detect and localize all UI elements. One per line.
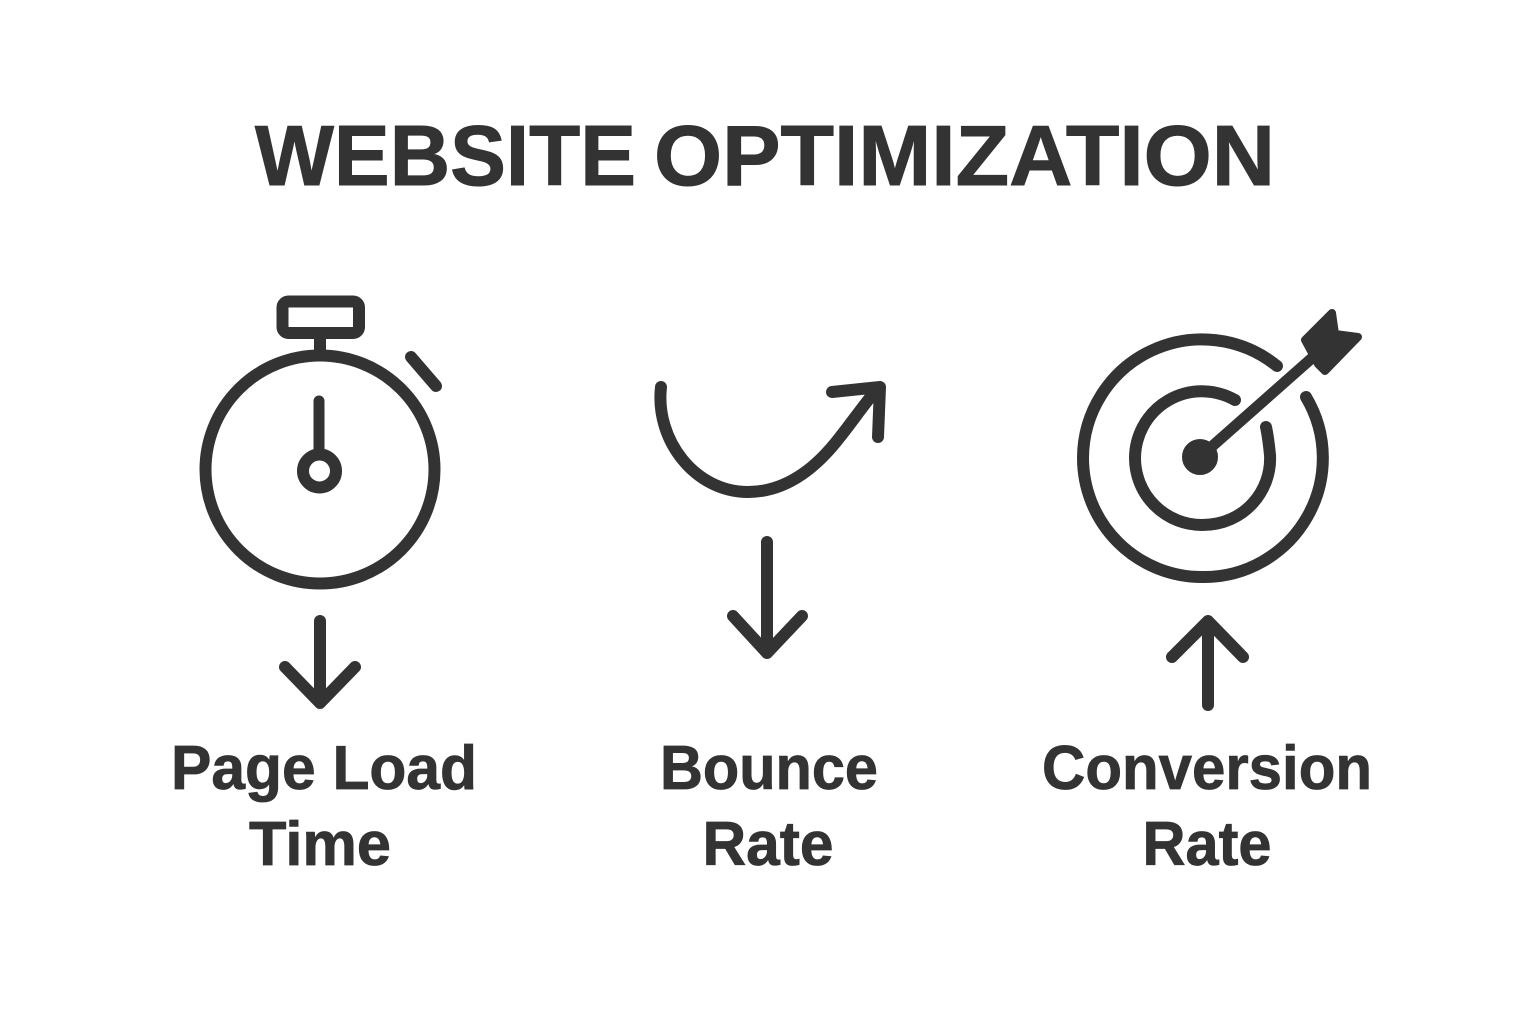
label: bounce rate bbox=[660, 734, 878, 879]
label: page load time: Time bbox=[249, 810, 391, 879]
label: conversion rate: Rate bbox=[1142, 810, 1272, 879]
arrow: conversion rate up bbox=[1172, 621, 1243, 705]
label: bounce rate: Bounce bbox=[660, 734, 878, 803]
title: WEBSITE bbox=[255, 109, 636, 204]
arrow: bounce rate down bbox=[733, 542, 802, 653]
label: bounce rate: Rate bbox=[702, 810, 834, 879]
icon: bounce curve bbox=[660, 387, 880, 492]
label: conversion rate bbox=[1042, 734, 1372, 879]
icon: target with arrow bbox=[1083, 313, 1358, 577]
title: OPTIMIZATION bbox=[654, 109, 1275, 204]
icon: stopwatch bbox=[206, 302, 436, 584]
label: page load time: Page Load bbox=[171, 734, 477, 803]
arrow: page load time down bbox=[285, 621, 355, 703]
label: conversion rate: Conversion bbox=[1042, 734, 1372, 803]
label: page load time bbox=[171, 734, 477, 879]
title bbox=[255, 109, 1275, 204]
